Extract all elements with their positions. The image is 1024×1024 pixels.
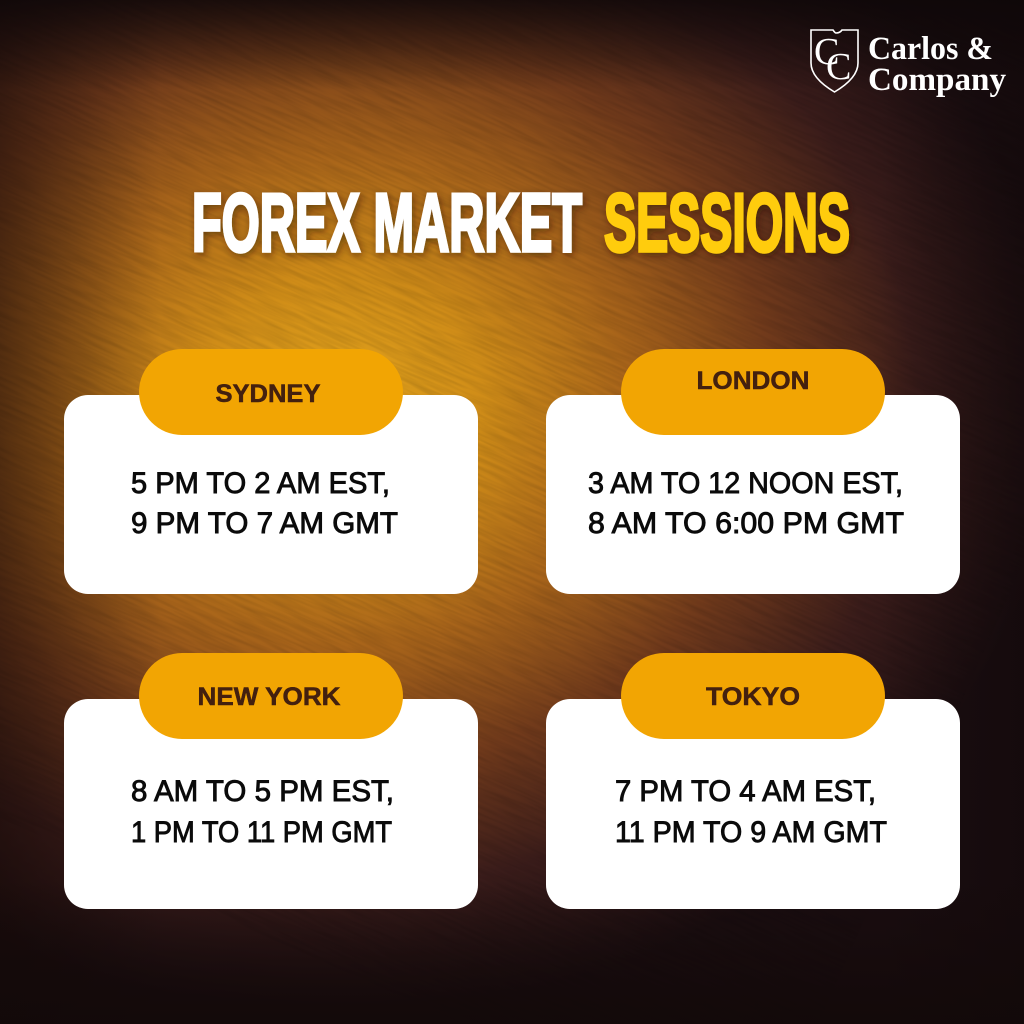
session hours: 3 AM TO 12 NOON EST,	[588, 467, 903, 500]
pill heading: London	[621, 349, 885, 435]
session hours: 5 PM TO 2 AM EST,	[131, 467, 390, 500]
icon: shield crest	[811, 30, 858, 92]
title: SESSIONS	[604, 176, 850, 269]
pill heading: Sydney: SYDNEY	[216, 380, 321, 408]
card body	[546, 395, 960, 594]
session hours	[131, 775, 394, 849]
session hours: 1 PM TO 11 PM GMT	[131, 816, 392, 849]
card body	[546, 699, 960, 909]
logo: Carlos & Company	[811, 30, 1006, 98]
panel: New York	[64, 653, 478, 909]
session hours: 8 AM TO 5 PM EST,	[131, 775, 394, 808]
pill heading: New York	[139, 653, 403, 739]
session hours	[615, 775, 887, 849]
session hours: 7 PM TO 4 AM EST,	[615, 775, 876, 808]
icon: shield crest: C	[814, 31, 839, 73]
session hours: 8 AM TO 6:00 PM GMT	[588, 507, 904, 540]
panel: London	[546, 349, 960, 594]
title: FOREX MARKET	[192, 176, 582, 269]
session hours	[588, 467, 904, 540]
pill heading: Tokyo: TOKYO	[706, 683, 800, 711]
pill heading: London: LONDON	[696, 367, 810, 395]
card body	[64, 699, 478, 909]
panel: Sydney	[64, 349, 478, 594]
icon: shield crest: C	[826, 46, 851, 88]
card body	[64, 395, 478, 594]
logo wordmark: Company	[868, 62, 1006, 98]
session hours	[131, 467, 398, 540]
logo wordmark	[868, 31, 1006, 98]
pill heading: Sydney	[139, 349, 403, 435]
panel: Tokyo	[546, 653, 960, 909]
logo wordmark: Carlos &	[868, 31, 993, 67]
pill heading: New York: NEW YORK	[198, 683, 340, 711]
session hours: 9 PM TO 7 AM GMT	[131, 507, 398, 540]
session hours: 11 PM TO 9 AM GMT	[615, 816, 887, 849]
pill heading: Tokyo	[621, 653, 885, 739]
